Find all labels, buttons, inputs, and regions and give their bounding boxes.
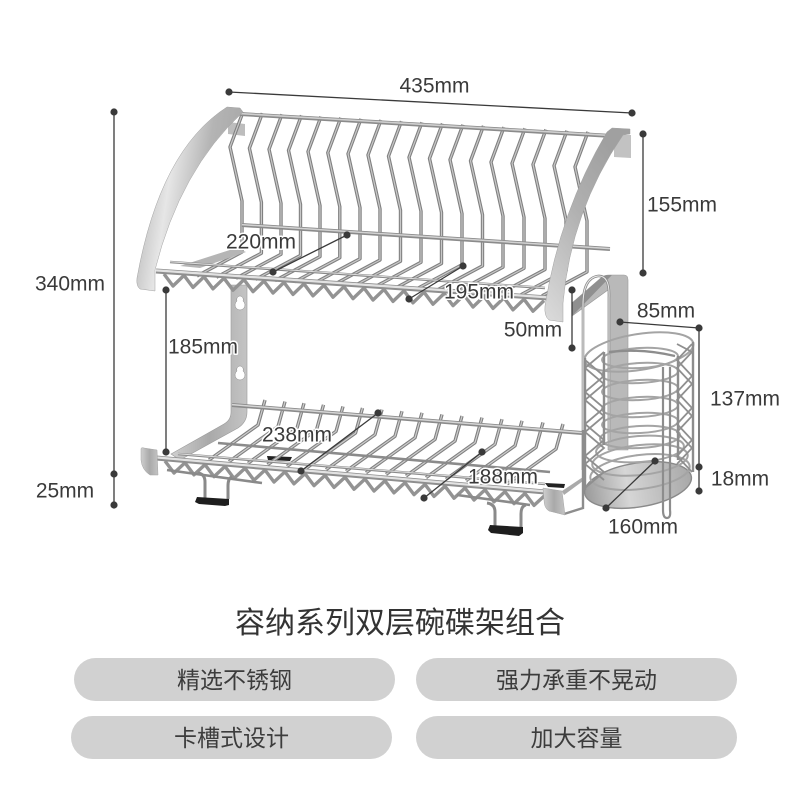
top rack zigzag xyxy=(164,274,544,311)
top rack front rail xyxy=(156,271,548,298)
dimension: 85mm: 85mm xyxy=(637,300,695,322)
dimension: 185mm xyxy=(162,286,238,456)
basket base xyxy=(581,455,695,515)
dimension: 435mm: 435mm xyxy=(399,74,470,98)
feature pill: stainless steel xyxy=(74,658,395,701)
dimension: 50mm: 50mm xyxy=(504,318,562,342)
dimension: 25mm xyxy=(36,480,118,509)
dimension: 188mm: 188mm xyxy=(468,466,538,488)
right wall bracket xyxy=(572,275,628,470)
top rack second rail xyxy=(170,262,545,288)
basket hook loop xyxy=(663,367,670,518)
dimension: 18mm xyxy=(695,467,769,495)
feature pill: large capacity xyxy=(416,716,737,759)
right rear mount xyxy=(614,135,631,158)
top shelf support band xyxy=(180,248,246,268)
dimension: 18mm: 18mm xyxy=(711,468,769,490)
dimension: 340mm xyxy=(35,108,118,505)
dimension: 155mm xyxy=(639,130,717,277)
left wall bracket with keyholes xyxy=(171,285,247,460)
right tray end cap and side band xyxy=(543,430,583,515)
dimension: 340mm: 340mm xyxy=(35,272,105,296)
utensil basket xyxy=(581,326,696,518)
bottom rack cross rails xyxy=(218,443,550,472)
basket crosshatch xyxy=(585,344,692,488)
basket inner rings xyxy=(588,346,692,495)
left foot hook xyxy=(167,470,262,506)
right curved side arm xyxy=(545,128,630,322)
dimension: 160mm: 160mm xyxy=(608,516,678,538)
dimension: 188mm xyxy=(420,448,538,502)
top rack middle rail xyxy=(242,225,610,249)
basket uprights xyxy=(585,342,693,490)
feature pill: stainless steel: 精选不锈钢 xyxy=(177,667,292,693)
title: 容纳系列双层碗碟架组合 xyxy=(235,607,565,640)
dimension: 195mm: 195mm xyxy=(444,280,514,304)
dimension: 220mm: 220mm xyxy=(226,230,296,254)
feature pill: slot design xyxy=(71,716,392,759)
dimension: 50mm xyxy=(504,286,576,352)
left rear mount xyxy=(228,122,245,136)
dimension: 195mm xyxy=(405,262,514,304)
dimension: 238mm xyxy=(262,409,382,475)
dimension: 220mm xyxy=(226,230,351,276)
bottom rack feet behind xyxy=(267,456,565,488)
dimension: 137mm: 137mm xyxy=(710,388,780,410)
dimension: 238mm: 238mm xyxy=(262,424,332,446)
feature pill: large capacity: 加大容量 xyxy=(530,725,622,751)
dimension: 185mm: 185mm xyxy=(168,336,238,358)
left tray end cap xyxy=(141,448,158,475)
left curved side arm xyxy=(137,107,243,291)
bottom rack zigzag xyxy=(165,461,545,505)
feature pill: strong load bearing xyxy=(416,658,737,701)
dimension: 160mm xyxy=(602,457,678,538)
dimension: 137mm xyxy=(695,328,780,471)
feature pill: strong load bearing: 强力承重不晃动 xyxy=(496,667,657,693)
dimension: 85mm xyxy=(616,300,703,332)
dimension: 155mm: 155mm xyxy=(647,194,717,216)
top rack wires xyxy=(156,112,612,311)
right foot hook xyxy=(457,495,530,536)
dimension: 25mm: 25mm xyxy=(36,480,94,502)
top rack rear rail xyxy=(240,114,612,136)
bottom rack front rail xyxy=(156,458,545,492)
feature pill: slot design: 卡槽式设计 xyxy=(174,725,289,751)
bottom rack rear rail xyxy=(232,405,582,433)
dimension: 435mm xyxy=(225,74,636,117)
bottom rack xyxy=(156,400,582,505)
basket outer rim xyxy=(582,326,696,378)
